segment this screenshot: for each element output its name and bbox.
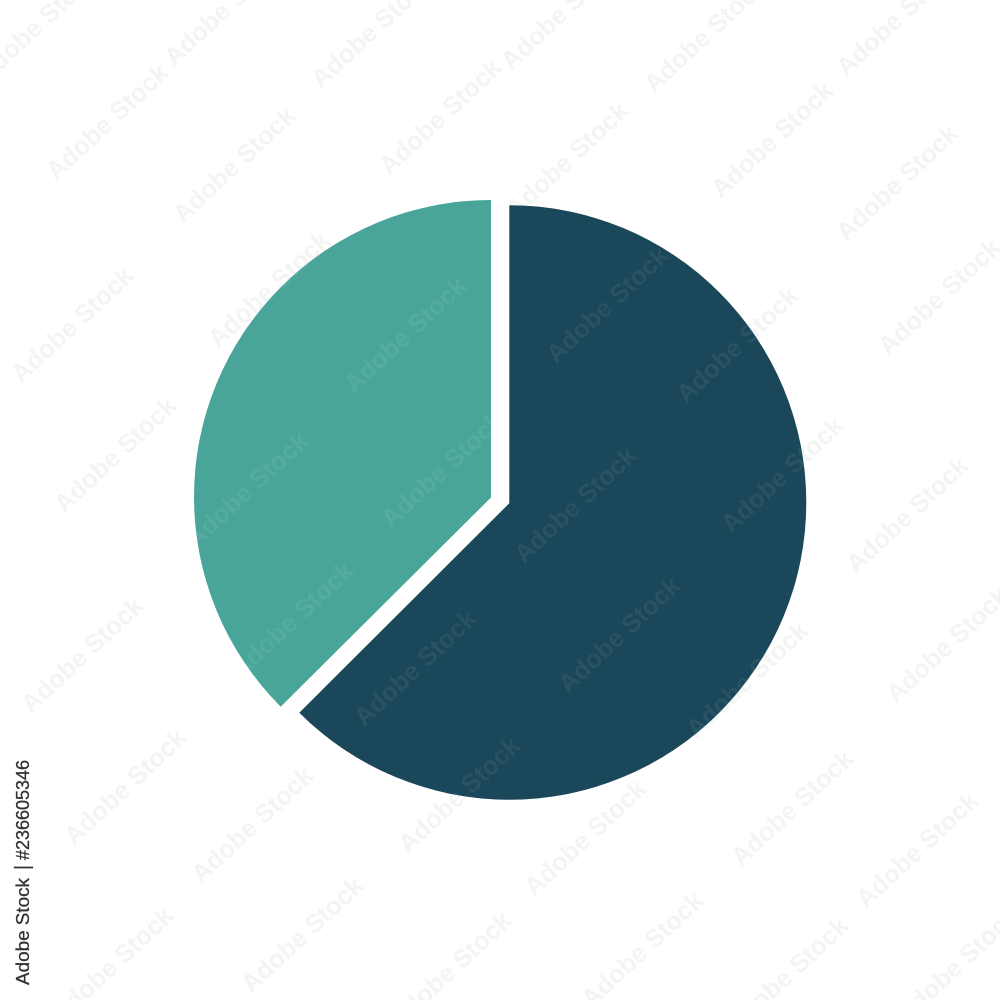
watermark pattern on background: Adobe Stock	[16, 591, 150, 719]
watermark pattern on background: Adobe Stock	[706, 76, 840, 204]
stock image id label: Adobe Stock	[13, 877, 33, 985]
watermark pattern on pie: Adobe Stock	[393, 731, 527, 859]
watermark pattern on background: Adobe Stock	[501, 96, 635, 224]
watermark pattern on pie: Adobe Stock	[553, 571, 687, 699]
watermark pattern on pie: Adobe Stock	[203, 226, 337, 354]
watermark pattern on pie: Adobe Stock	[376, 406, 510, 534]
watermark pattern on background: Adobe Stock	[671, 281, 805, 409]
watermark pattern on background: Adobe Stock	[831, 119, 965, 247]
watermark pattern on pie: Adobe Stock	[681, 616, 815, 744]
watermark pattern on background: Adobe Stock	[681, 616, 815, 744]
watermark pattern on background: Adobe Stock	[6, 261, 140, 389]
watermark pattern on background: Adobe Stock	[49, 391, 183, 519]
watermark pattern on background: Adobe Stock	[851, 786, 985, 914]
watermark pattern on pie: Adobe Stock	[349, 604, 483, 732]
stock image id label: |	[12, 865, 34, 870]
watermark pattern on background: Adobe Stock	[41, 58, 175, 186]
watermark pattern on pie: Adobe Stock	[541, 241, 675, 369]
watermark pattern on background: Adobe Stock	[236, 871, 370, 999]
watermark pattern on background: Adobe Stock	[186, 761, 320, 889]
watermark pattern on pie: Adobe Stock	[181, 426, 315, 554]
watermark pattern on background: Adobe Stock	[519, 774, 653, 902]
watermark pattern on background: Adobe Stock	[203, 226, 337, 354]
watermark pattern on background: Adobe Stock	[393, 731, 527, 859]
pie slice: dark navy majority segment	[299, 205, 806, 800]
watermark pattern on background: Adobe Stock	[59, 723, 193, 851]
watermark pattern on background: Adobe Stock	[841, 451, 975, 579]
watermark pattern on pie: Adobe Stock	[509, 441, 643, 569]
stock image id label: #236605346	[13, 760, 33, 860]
watermark pattern on background: Adobe Stock	[374, 53, 508, 181]
watermark pattern on pie: Adobe Stock	[226, 556, 360, 684]
watermark pattern on pie	[181, 226, 850, 859]
watermark pattern on pie: Adobe Stock	[339, 271, 473, 399]
watermark pattern on background: Adobe Stock	[726, 744, 860, 872]
pie slice: teal minority segment	[194, 200, 491, 707]
stock image id label	[12, 760, 34, 985]
watermark pattern on pie: Adobe Stock	[716, 411, 850, 539]
watermark pattern on background: Adobe Stock	[168, 101, 302, 229]
watermark pattern on pie: Adobe Stock	[671, 281, 805, 409]
watermark pattern on background: Adobe Stock	[716, 411, 850, 539]
